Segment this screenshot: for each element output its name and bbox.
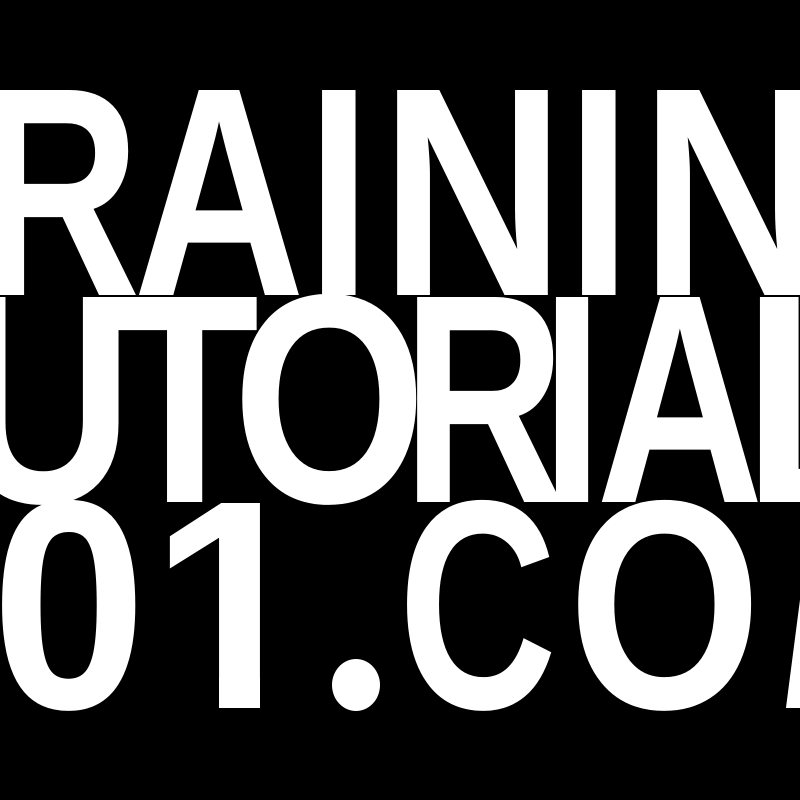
line 3: 101.COM: 1 — [150, 439, 315, 772]
line 1: TRAINING: N — [380, 25, 565, 358]
line 1: TRAINING: I — [306, 25, 371, 359]
line 1: TRAINING — [0, 25, 800, 359]
line 2: TUTORIALS: A — [596, 232, 764, 566]
line 1: TRAINING: I — [566, 25, 631, 359]
line 3: 101.COM — [0, 438, 800, 772]
line 1: TRAINING: A — [133, 27, 305, 359]
line 3: 101.COM: C — [398, 439, 557, 772]
line 3: 101.COM: O — [568, 439, 762, 772]
line 2: TUTORIALS: T — [110, 232, 259, 565]
line 2: TUTORIALS: I — [541, 233, 603, 565]
line 2: TUTORIALS: R — [402, 233, 566, 566]
line 3: 101.COM: . — [350, 669, 358, 702]
line 2: TUTORIALS: O — [232, 233, 427, 566]
line 2: TUTORIALS — [0, 232, 800, 566]
